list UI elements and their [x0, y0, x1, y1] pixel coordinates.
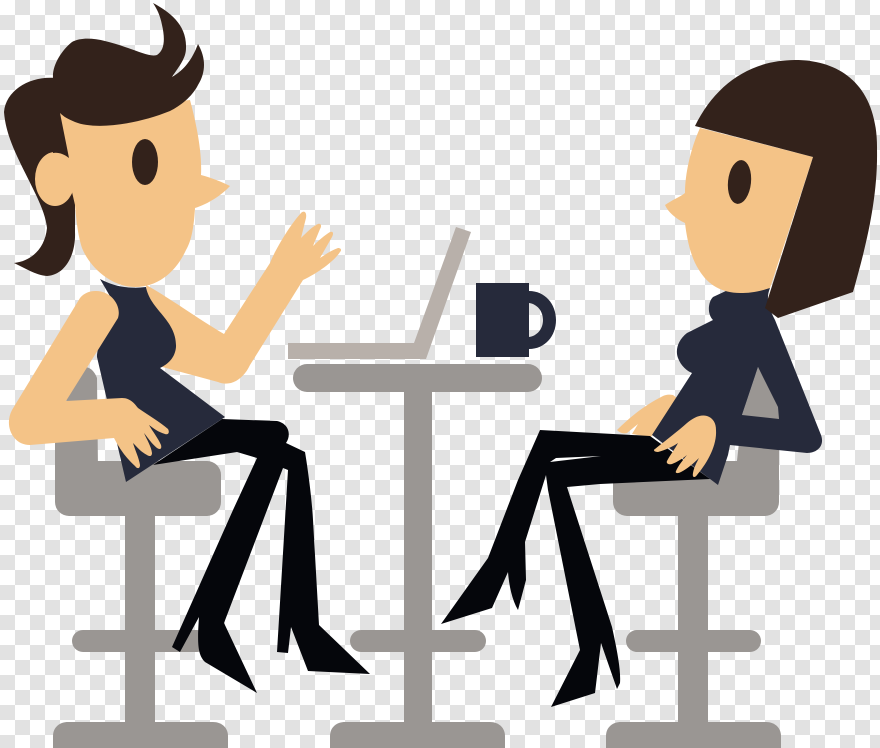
face — [60, 100, 230, 287]
top hair with curl — [53, 3, 204, 158]
hand behind thigh — [617, 395, 677, 437]
black trousers and boots — [153, 419, 370, 693]
sleeveless top — [97, 279, 225, 482]
black trousers and boots — [441, 430, 710, 707]
bent arm and hand — [9, 291, 169, 468]
ear — [35, 152, 75, 206]
eye — [132, 139, 158, 185]
coffee mug — [476, 283, 556, 357]
ponytail and back hair — [4, 78, 75, 276]
right woman — [441, 60, 877, 707]
bob hair — [695, 60, 877, 318]
right stool — [606, 367, 781, 748]
laptop — [288, 227, 471, 359]
left stool — [53, 367, 228, 748]
raised arm and hand — [146, 212, 341, 384]
front hand — [654, 415, 716, 477]
eye — [726, 159, 753, 205]
left woman — [4, 3, 370, 693]
face — [665, 128, 813, 293]
turtleneck top and arm — [652, 288, 822, 485]
center table — [293, 364, 542, 748]
gap between thighs — [550, 456, 601, 462]
